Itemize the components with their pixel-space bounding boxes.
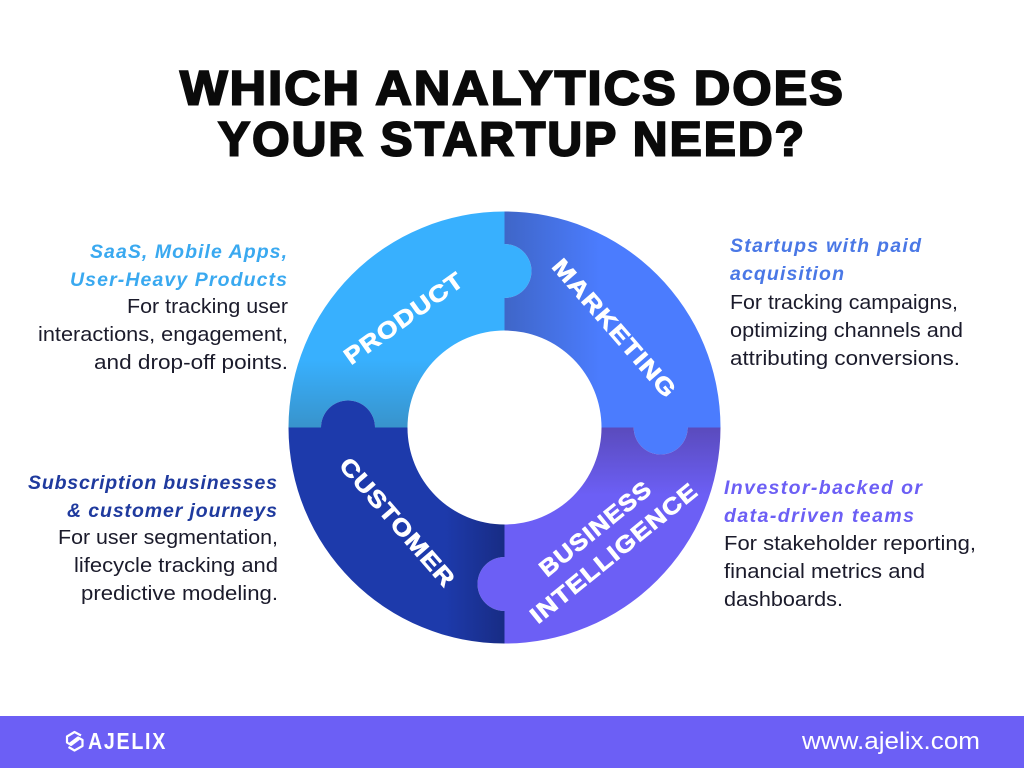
title: WHICH ANALYTICS DOES (180, 62, 845, 116)
segment: business intelligence: INTELLIGENCE (525, 477, 703, 628)
puzzle wheel diagram (288, 212, 720, 644)
text block: customer: predictive modeling. (81, 582, 278, 605)
text block: business intelligence: For stakeholder reporting, (724, 532, 976, 555)
text block: marketing: attributing conversions. (730, 347, 960, 370)
text block: customer: Subscription businesses (28, 472, 277, 494)
logo wordmark: AJELIX (88, 728, 167, 754)
text block: product: interactions, engagement, (38, 323, 288, 346)
text block: business intelligence: Investor-backed or (724, 477, 923, 499)
text block: marketing: acquisition (730, 263, 844, 285)
icon: ajelix logo mark (67, 732, 82, 750)
text block: marketing (730, 235, 963, 370)
title (180, 62, 845, 166)
segment: marketing (504, 212, 720, 454)
website url: www.ajelix.com (801, 728, 980, 755)
text block: product (38, 241, 288, 374)
text block: business intelligence: financial metrics and (724, 560, 925, 583)
text block: product: SaaS, Mobile Apps, (90, 241, 287, 263)
footer bar (0, 716, 1024, 768)
text block: customer (28, 472, 278, 605)
segment: product (288, 212, 532, 428)
text block: customer: & customer journeys (67, 500, 277, 522)
text block: business intelligence: dashboards. (724, 588, 843, 611)
segment: product: PRODUCT (339, 266, 469, 369)
title: YOUR STARTUP NEED? (218, 114, 806, 166)
text block: marketing: Startups with paid (730, 235, 922, 257)
segment: business intelligence (477, 428, 720, 644)
text block: product: User-Heavy Products (70, 269, 287, 291)
text block: customer: lifecycle tracking and (74, 554, 278, 577)
segment: marketing: MARKETING (547, 253, 682, 403)
segment: customer (288, 400, 504, 644)
segment: business intelligence: BUSINESS (534, 475, 657, 582)
text block: product: For tracking user (127, 295, 288, 318)
text block: business intelligence (724, 477, 976, 611)
text block: customer: For user segmentation, (58, 526, 278, 549)
text block: business intelligence: data-driven teams (724, 505, 914, 527)
text block: marketing: optimizing channels and (730, 319, 963, 342)
segment: customer: CUSTOMER (334, 452, 461, 592)
text block: marketing: For tracking campaigns, (730, 291, 958, 314)
text block: product: and drop-off points. (94, 351, 288, 374)
